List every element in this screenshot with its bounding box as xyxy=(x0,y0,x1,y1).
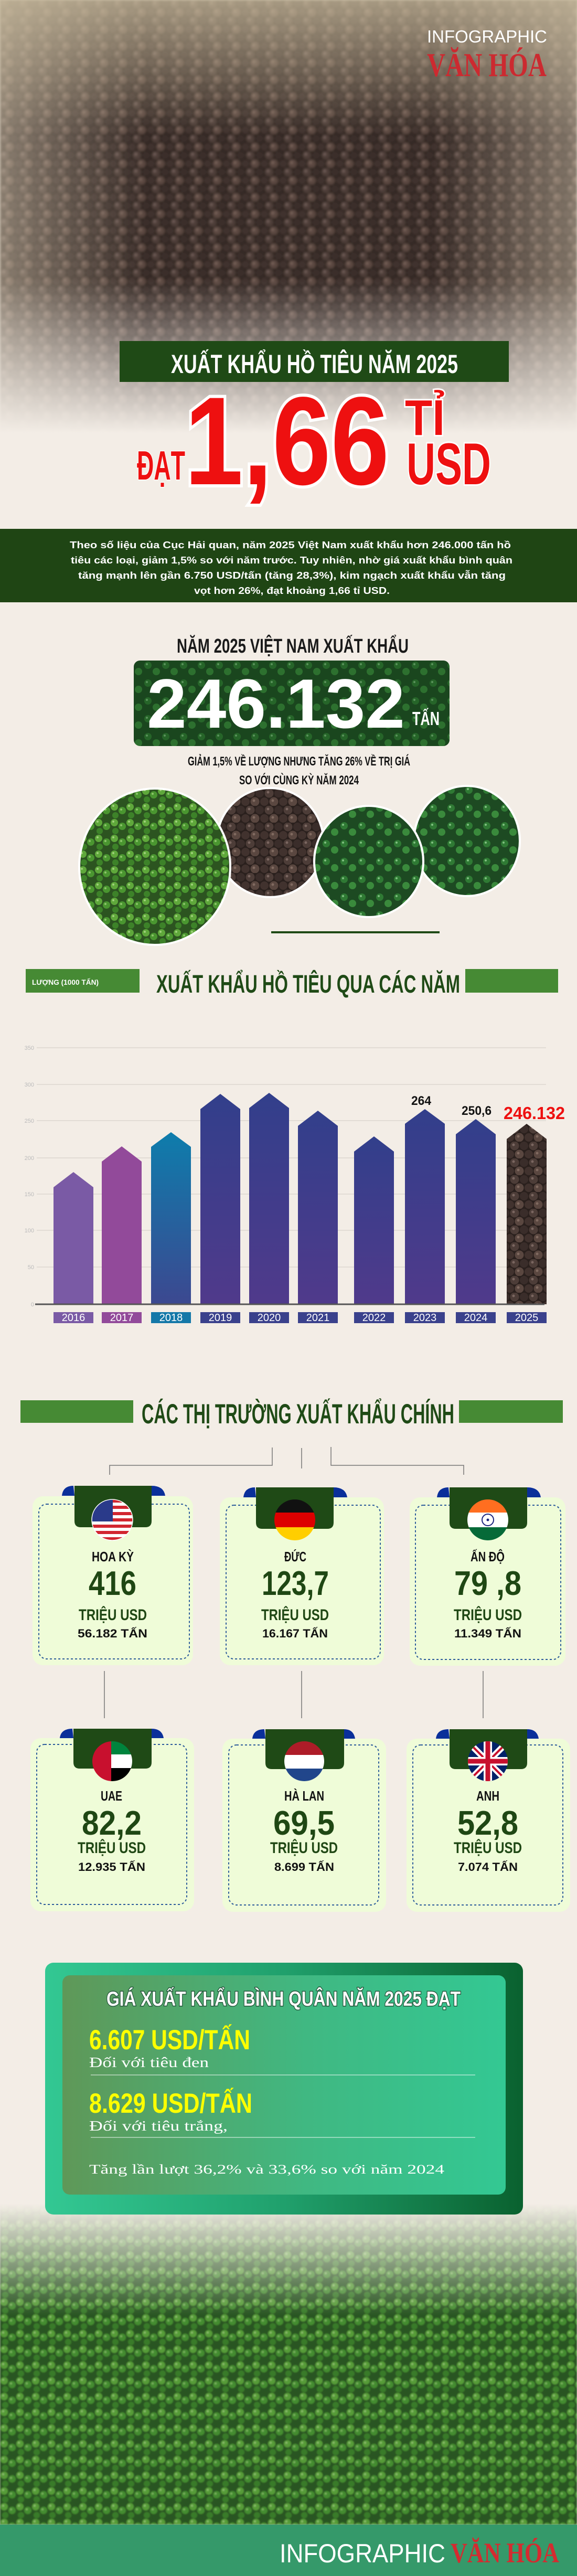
card: Anh: ANH xyxy=(476,1788,499,1804)
intro paragraph band: Theo số liệu của Cục Hải quan, năm 2025 Việt Nam xuất khẩu hơn 246.000 tấn hồ xyxy=(70,540,511,550)
card: Hoa Kỳ: HOA KỲ xyxy=(92,1549,134,1564)
bar chart: export volume by year: 350 xyxy=(25,1045,34,1051)
card: Hoa Kỳ: TRIỆU USD xyxy=(79,1606,147,1624)
bar chart: export volume by year: 100 xyxy=(25,1228,34,1234)
photo circles of pepper xyxy=(79,786,520,945)
intro paragraph band: tăng mạnh lên gần 6.750 USD/tấn (tăng 28,3%), kim ngạch xuất khẩu vẫn tăng xyxy=(78,570,506,581)
card: Đức xyxy=(220,1487,384,1665)
title banner: XUẤT KHẨU HỒ TIÊU NĂM 2025 xyxy=(171,349,458,379)
bar chart: export volume by year: 2025 xyxy=(515,1312,538,1324)
card: Đức: 16.167 TẤN xyxy=(262,1627,328,1640)
bar chart: export volume by year: 200 xyxy=(25,1155,34,1162)
title banner xyxy=(120,341,509,382)
bar chart: export volume by year: 2019 xyxy=(209,1312,232,1324)
card: Anh: 7.074 TẤN xyxy=(458,1860,518,1874)
icon: UK flag xyxy=(467,1741,509,1783)
bottom photo: green pepper clusters xyxy=(0,2204,577,2525)
connector lines xyxy=(104,1447,483,1718)
intro paragraph band xyxy=(0,529,577,602)
card: Ấn Độ xyxy=(410,1487,565,1666)
chart heading xyxy=(26,969,558,998)
bar chart: export volume by year: 2020 xyxy=(258,1312,281,1324)
card: Hoa Kỳ: 416 xyxy=(89,1564,136,1602)
icon: Germany flag xyxy=(274,1499,315,1540)
logo: infographic van hoa (top) xyxy=(427,27,547,83)
card: Ấn Độ: ẤN ĐỘ xyxy=(471,1549,505,1564)
chart heading: LƯỢNG (1000 TẤN) xyxy=(32,978,99,986)
volume change note xyxy=(188,753,410,787)
intro paragraph band: vọt hơn 26%, đạt khoảng 1,66 tỉ USD. xyxy=(194,586,390,596)
icon: India flag xyxy=(467,1499,508,1540)
card: Anh: 52,8 xyxy=(457,1804,518,1842)
card: Anh xyxy=(407,1729,570,1912)
intro paragraph band: tiêu các loại, giảm 1,5% so với năm trước. Tuy nhiên, nhờ giá xuất khẩu bình quân xyxy=(71,555,512,566)
panel: average export price: 6.607 USD/TẤN xyxy=(89,2024,250,2056)
card: UAE: 12.935 TẤN xyxy=(78,1860,145,1874)
bar chart: export volume by year: 300 xyxy=(25,1082,34,1088)
bar chart: export volume by year: 150 xyxy=(25,1191,34,1198)
panel: average export price: Đối với tiêu trắng, xyxy=(89,2118,228,2134)
footer band with logo: INFOGRAPHIC xyxy=(280,2539,445,2568)
headline value: đạt 1,66 tỉ USD: ĐẠT xyxy=(137,442,185,488)
card: Hoa Kỳ xyxy=(33,1486,193,1665)
footer band with logo xyxy=(0,2525,577,2576)
bar chart: export volume by year: 2016 xyxy=(62,1312,85,1324)
bar chart: export volume by year: 2022 xyxy=(362,1312,386,1324)
headline value: đạt 1,66 tỉ USD: USD xyxy=(407,431,491,497)
headline value: đạt 1,66 tỉ USD xyxy=(137,371,491,511)
card: UAE: TRIỆU USD xyxy=(78,1839,146,1857)
volume box: 246.132 tấn: 246.132 xyxy=(147,665,405,743)
volume box: 246.132 tấn: TẤN xyxy=(412,708,440,729)
bar chart: export volume by year: 2018 xyxy=(159,1312,183,1324)
card: UAE: UAE xyxy=(101,1788,122,1804)
panel: average export price: Tăng lần lượt 36,2% và 33,6% so với năm 2024 xyxy=(89,2163,445,2177)
card: Ấn Độ: 11.349 TẤN xyxy=(454,1627,521,1640)
logo: infographic van hoa (top): INFOGRAPHIC xyxy=(427,27,547,46)
panel: average export price: 8.629 USD/TẤN xyxy=(89,2088,252,2119)
panel: average export price xyxy=(45,1963,523,2215)
bar chart: export volume by year: 2023 xyxy=(413,1312,436,1324)
bar chart: export volume by year: 50 xyxy=(28,1264,34,1271)
panel: average export price: Đối với tiêu đen xyxy=(89,2055,209,2070)
card: UAE xyxy=(30,1729,194,1911)
volume change note: SO VỚI CÙNG KỲ NĂM 2024 xyxy=(239,773,359,787)
bar chart: export volume by year: 2021 xyxy=(306,1312,329,1324)
card: UAE: 82,2 xyxy=(82,1804,142,1842)
bar chart: export volume by year: 246.132 xyxy=(504,1103,565,1123)
icon: US flag xyxy=(92,1499,132,1540)
card: Đức: ĐỨC xyxy=(284,1549,306,1564)
bar chart: export volume by year: 250 xyxy=(25,1118,34,1124)
icon: UAE flag xyxy=(92,1741,132,1781)
bar chart: export volume by year: 2017 xyxy=(110,1312,133,1324)
icon: Netherlands flag xyxy=(283,1741,325,1783)
card: Đức: TRIỆU USD xyxy=(261,1606,329,1624)
volume heading: NĂM 2025 VIỆT NAM XUẤT KHẨU xyxy=(177,634,409,657)
card: Hoa Kỳ: 56.182 TẤN xyxy=(78,1627,147,1640)
card: Anh: TRIỆU USD xyxy=(454,1839,522,1857)
bar chart: export volume by year: 264 xyxy=(411,1094,432,1108)
card: Hà Lan: 8.699 TẤN xyxy=(274,1860,334,1874)
bar chart: export volume by year xyxy=(25,1045,565,1324)
bar chart: export volume by year: 2024 xyxy=(464,1312,487,1324)
bar chart: export volume by year: 0 xyxy=(31,1302,34,1308)
bar chart: export volume by year: 250,6 xyxy=(462,1104,491,1118)
card: Hà Lan: HÀ LAN xyxy=(284,1788,324,1804)
card: Ấn Độ: 79 ,8 xyxy=(454,1564,521,1602)
card: Ấn Độ: TRIỆU USD xyxy=(454,1606,522,1624)
header photo: black pepper xyxy=(0,0,577,451)
card: Hà Lan: 69,5 xyxy=(273,1804,335,1842)
panel: average export price: GIÁ XUẤT KHẨU BÌNH QUÂN NĂM 2025 ĐẠT xyxy=(106,1987,461,2010)
card: Hà Lan: TRIỆU USD xyxy=(270,1839,338,1857)
card: Hà Lan xyxy=(222,1729,386,1912)
headline value: đạt 1,66 tỉ USD: 1,66 xyxy=(185,371,389,511)
card: Đức: 123,7 xyxy=(262,1564,329,1602)
headline value: đạt 1,66 tỉ USD: TỈ xyxy=(405,389,445,446)
volume change note: GIẢM 1,5% VỀ LƯỢNG NHƯNG TĂNG 26% VỀ TRỊ GIÁ xyxy=(188,753,410,769)
